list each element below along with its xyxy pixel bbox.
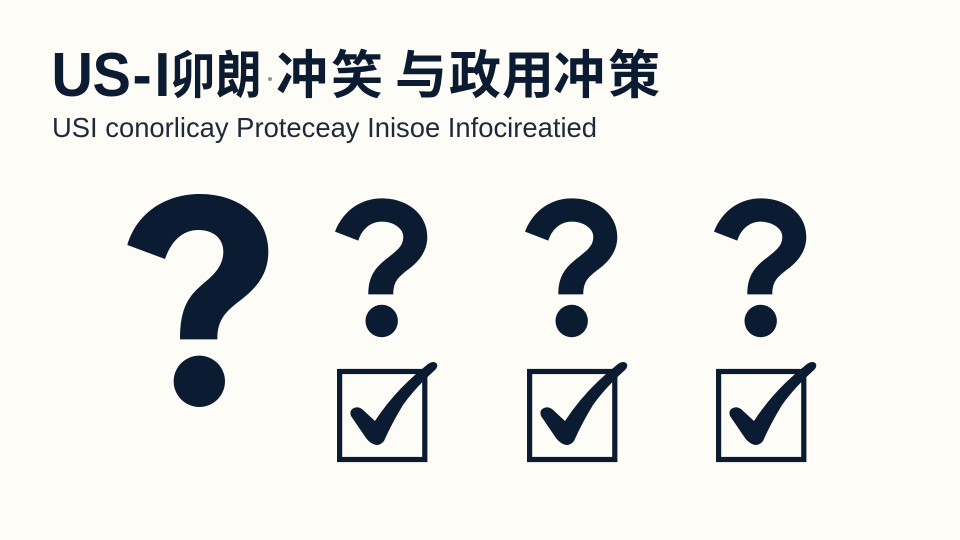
title: 卯朗 xyxy=(170,48,262,105)
icon: checkbox 1 xyxy=(340,362,437,460)
icon: checkbox 3 xyxy=(719,362,816,460)
title: 冲笑与政用冲策 xyxy=(276,48,660,106)
title xyxy=(51,40,660,109)
icon: large question mark xyxy=(127,194,268,407)
icon: question mark 1 xyxy=(335,198,427,337)
icon: question mark 2 xyxy=(525,198,617,337)
subtitle: USI conorlicay Proteceay Inisoe Infocireatied xyxy=(52,112,597,143)
title: US-I xyxy=(51,40,170,109)
icon: checkbox 2 xyxy=(530,362,627,460)
icon: question mark 3 xyxy=(714,198,806,337)
